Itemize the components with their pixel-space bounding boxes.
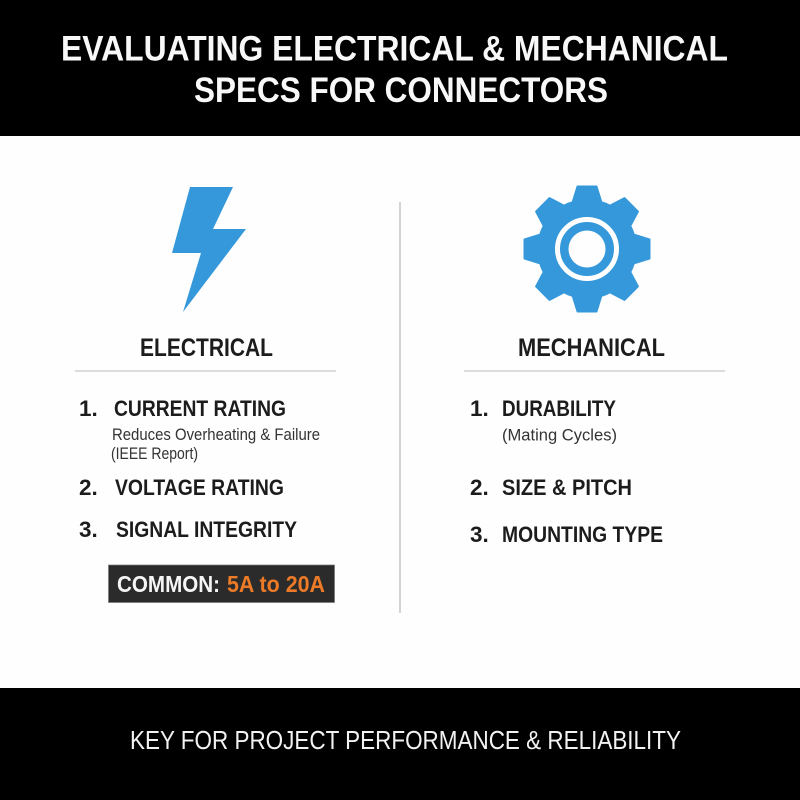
item 3: signal integrity: SIGNAL INTEGRITY (116, 517, 297, 542)
item 1: current rating: 1. (79, 396, 98, 421)
panel: mechanical (464, 186, 725, 547)
item 1: durability: 1. (470, 396, 489, 421)
item 3: mounting type: MOUNTING TYPE (502, 522, 663, 547)
icon: lightning bolt (172, 187, 246, 312)
item 1: durability: (Mating Cycles) (502, 426, 617, 444)
item 2: voltage rating: 2. (79, 475, 98, 500)
item 1: durability: DURABILITY (502, 396, 616, 421)
item 1: current rating: (IEEE Report) (111, 444, 198, 463)
heading: mechanical: MECHANICAL (518, 334, 665, 362)
heading: electrical: ELECTRICAL (140, 334, 273, 362)
footer banner (0, 688, 800, 800)
title banner: SPECS FOR CONNECTORS (194, 70, 608, 110)
item 3: mounting type: 3. (470, 522, 489, 547)
item 1: current rating: CURRENT RATING (114, 396, 286, 421)
title banner (0, 0, 800, 136)
item 1: current rating (79, 396, 320, 463)
item 1: current rating: Reduces Overheating & Failure (112, 425, 320, 444)
item 2: voltage rating: VOLTAGE RATING (115, 475, 284, 500)
panel: electrical (75, 187, 336, 602)
icon: gear (524, 186, 650, 312)
item 2: size and pitch: SIZE & PITCH (502, 475, 632, 500)
callout: common range (108, 565, 334, 602)
item 2: size and pitch: 2. (470, 475, 489, 500)
title banner: EVALUATING ELECTRICAL & MECHANICAL (61, 28, 728, 68)
item 3: signal integrity: 3. (79, 517, 98, 542)
footer banner: KEY FOR PROJECT PERFORMANCE & RELIABILITY (130, 725, 681, 755)
callout: common range: 5A to 20A (227, 571, 325, 597)
item 1: durability (470, 396, 617, 444)
callout: common range: COMMON: (117, 571, 220, 597)
